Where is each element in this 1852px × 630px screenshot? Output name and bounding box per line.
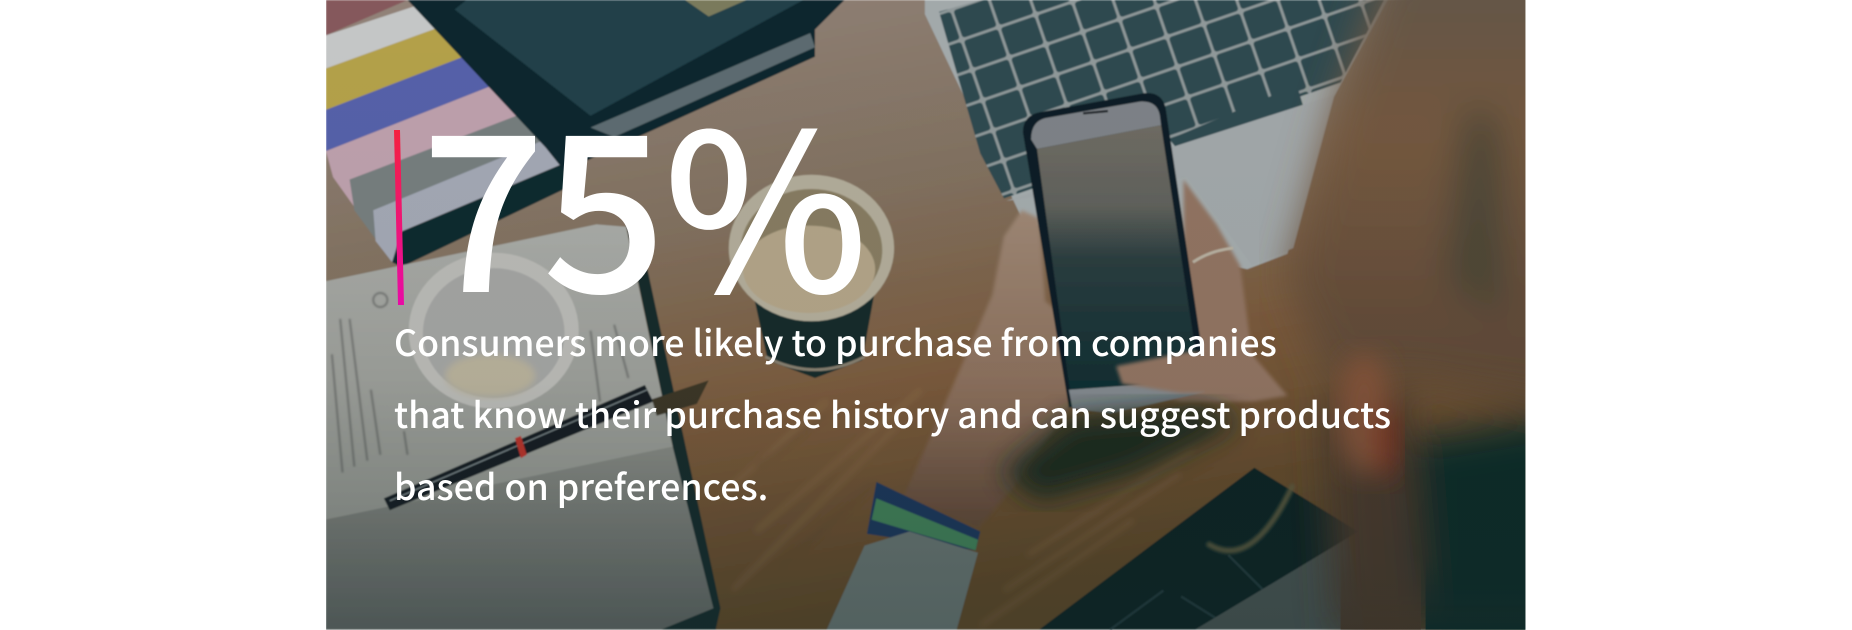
laptop keyboard (925, 0, 1388, 269)
tint overlay (326, 411, 1426, 630)
striped book (326, 0, 565, 267)
pen (384, 380, 709, 510)
description text: that know their purchase history and can suggest products (394, 388, 1391, 439)
blurred head and hair (1287, 0, 1571, 630)
description text (394, 316, 1391, 511)
coffee cup (729, 175, 894, 378)
dark binders (407, 0, 845, 171)
description text: Consumers more likely to purchase from companies (394, 316, 1277, 367)
big statistic: 75% (421, 39, 865, 355)
hands (904, 180, 1287, 528)
notebook (326, 224, 720, 630)
shadow under hands (1002, 404, 1240, 502)
smartphone (1023, 93, 1254, 413)
watch strap and sleeve (827, 482, 980, 630)
plastic lid (409, 253, 579, 409)
dark bench under table (1039, 468, 1364, 630)
accent bar (394, 130, 404, 305)
description text: based on preferences. (394, 460, 768, 511)
background photo: desk scene with phone (326, 0, 1526, 630)
